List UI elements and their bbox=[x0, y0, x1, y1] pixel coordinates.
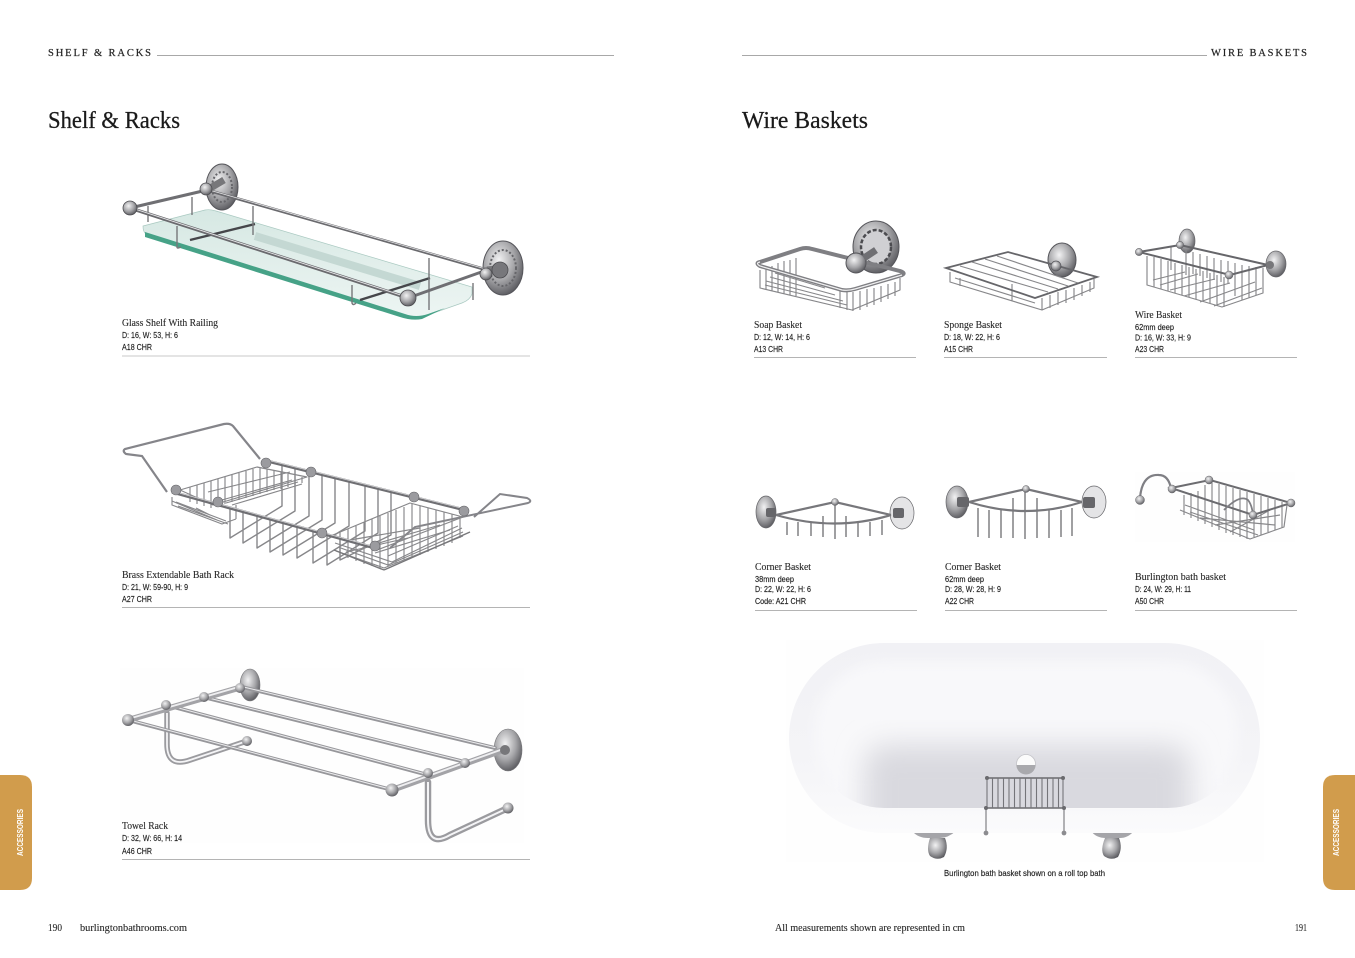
left page header: SHELF & RACKS bbox=[48, 48, 151, 59]
item text: sponge basket: D: 18, W: 22, H: 6 bbox=[944, 332, 1000, 342]
item text: corner basket 38mm bbox=[755, 562, 917, 610]
product image: sponge basket bbox=[946, 243, 1097, 310]
item text: glass shelf: A18 CHR bbox=[122, 342, 152, 352]
item text: wire basket: A23 CHR bbox=[1135, 344, 1164, 354]
item text: towel rack: D: 32, W: 66, H: 14 bbox=[122, 833, 182, 843]
item text: glass shelf bbox=[122, 318, 530, 356]
item text: sponge basket bbox=[944, 320, 1107, 358]
item text: wire basket: 62mm deep bbox=[1135, 322, 1174, 332]
footer: measurement note: All measurements shown are represented in cm bbox=[775, 923, 965, 934]
item text: soap basket: A13 CHR bbox=[754, 344, 783, 354]
item text: towel rack bbox=[122, 821, 530, 860]
heading: Shelf & Racks: Shelf & Racks bbox=[48, 108, 180, 134]
product image: glass shelf with railing bbox=[123, 164, 523, 320]
item text: corner basket 62mm: Corner Basket bbox=[945, 562, 1001, 573]
item text: corner basket 62mm: D: 28, W: 28, H: 9 bbox=[945, 584, 1001, 594]
item text: towel rack: A46 CHR bbox=[122, 846, 152, 856]
product image: corner basket 38mm bbox=[756, 496, 914, 539]
item text: corner basket 62mm: A22 CHR bbox=[945, 596, 974, 606]
product image: soap basket bbox=[758, 221, 904, 311]
caption: bath photo: Burlington bath basket shown on a roll top bath bbox=[944, 868, 1105, 878]
item text: sponge basket: A15 CHR bbox=[944, 344, 973, 354]
side tab: accessories left: ACCESSORIES bbox=[16, 808, 25, 856]
item text: soap basket: Soap Basket bbox=[754, 320, 802, 331]
item text: wire basket: Wire Basket bbox=[1135, 310, 1182, 321]
product image: wire basket bbox=[1135, 229, 1286, 307]
item text: corner basket 38mm: Code: A21 CHR bbox=[755, 596, 806, 606]
product image: Burlington bath basket bbox=[1135, 472, 1295, 542]
item text: bath rack: D: 21, W: 59-90, H: 9 bbox=[122, 582, 188, 592]
item text: sponge basket: Sponge Basket bbox=[944, 320, 1002, 331]
heading: Wire Baskets: Wire Baskets bbox=[742, 108, 868, 134]
icon: bath drain bbox=[1016, 754, 1036, 774]
item text: soap basket: D: 12, W: 14, H: 6 bbox=[754, 332, 810, 342]
basket on the bath rim bbox=[984, 776, 1066, 835]
item text: bath rack bbox=[122, 570, 530, 608]
item text: glass shelf: Glass Shelf With Railing bbox=[122, 318, 218, 329]
item text: Burlington bath basket: D: 24, W: 29, H: 11 bbox=[1135, 584, 1191, 594]
item text: corner basket 38mm: 38mm deep bbox=[755, 574, 794, 584]
product image: towel rack bbox=[120, 668, 524, 843]
item text: wire basket: D: 16, W: 33, H: 9 bbox=[1135, 332, 1191, 342]
bath feet bbox=[912, 831, 1134, 859]
footer: left page number: 190 bbox=[48, 923, 62, 934]
item text: bath rack: Brass Extendable Bath Rack bbox=[122, 570, 234, 581]
footer: website: burlingtonbathrooms.com bbox=[80, 923, 187, 934]
side tab: accessories left bbox=[0, 775, 32, 890]
item text: Burlington bath basket: Burlington bath basket bbox=[1135, 572, 1226, 583]
item text: wire basket bbox=[1135, 310, 1297, 358]
side tab: accessories right: ACCESSORIES bbox=[1332, 808, 1341, 856]
footer: right page number: 191 bbox=[1295, 923, 1307, 934]
item text: glass shelf: D: 16, W: 53, H: 6 bbox=[122, 330, 178, 340]
item text: corner basket 62mm bbox=[945, 562, 1107, 610]
photo: roll top bath with basket bbox=[786, 640, 1264, 862]
item text: corner basket 38mm: D: 22, W: 22, H: 6 bbox=[755, 584, 811, 594]
item text: corner basket 38mm: Corner Basket bbox=[755, 562, 811, 573]
item text: Burlington bath basket: A50 CHR bbox=[1135, 596, 1164, 606]
product image: brass extendable bath rack bbox=[124, 424, 530, 570]
item text: Burlington bath basket bbox=[1135, 572, 1297, 610]
side tab: accessories right bbox=[1323, 775, 1355, 890]
item text: corner basket 62mm: 62mm deep bbox=[945, 574, 984, 584]
item text: soap basket bbox=[754, 320, 916, 358]
right page header: WIRE BASKETS bbox=[1211, 48, 1307, 59]
product image: corner basket 62mm bbox=[946, 486, 1106, 539]
item text: towel rack: Towel Rack bbox=[122, 821, 168, 832]
item text: bath rack: A27 CHR bbox=[122, 594, 152, 604]
